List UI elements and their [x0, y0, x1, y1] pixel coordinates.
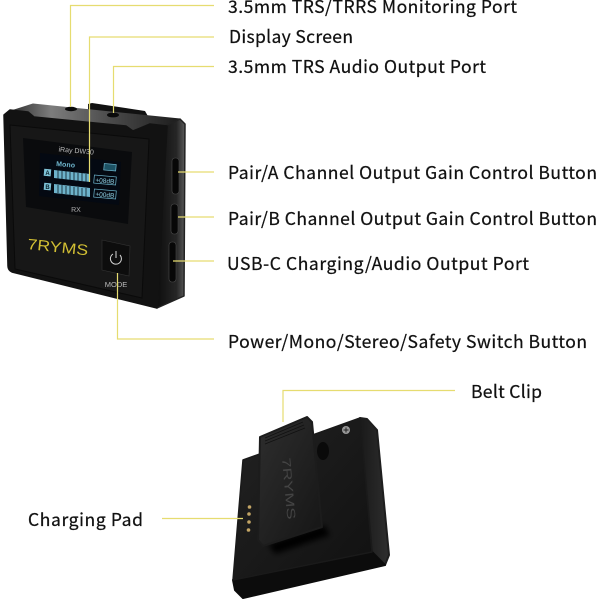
clip edge behind device	[88, 103, 149, 118]
RX label: RX	[71, 207, 81, 214]
channel B meter: +00dB	[95, 191, 115, 200]
clip shadow	[268, 525, 330, 554]
label: belt clip: Belt Clip	[471, 379, 542, 404]
power button	[102, 240, 130, 276]
label: audio output port: 3.5mm TRS Audio Output Port	[228, 54, 486, 79]
leader lines	[70, 6, 455, 518]
label: USB-C: USB-C Charging/Audio Output Port	[227, 251, 529, 276]
top face	[8, 104, 180, 132]
label: display screen: Display Screen	[229, 24, 353, 49]
charging pad contacts	[247, 505, 251, 532]
front device: receiver	[4, 103, 185, 308]
top ports	[65, 107, 77, 111]
clip	[258, 417, 322, 546]
side controls	[169, 158, 179, 282]
channel A meter	[44, 169, 116, 186]
side face	[157, 119, 185, 308]
front face	[4, 110, 167, 308]
channel A meter: A	[45, 171, 50, 177]
body bottom	[233, 552, 385, 598]
display	[39, 153, 121, 205]
battery icon	[104, 163, 116, 171]
channel B meter: B	[45, 185, 50, 191]
label: pair B: Pair/B Channel Output Gain Control Button	[228, 206, 597, 231]
channel A meter: +08dB	[95, 177, 115, 186]
label: pair A: Pair/A Channel Output Gain Control Button	[228, 160, 597, 185]
body side	[360, 418, 389, 565]
device name: iRay DW30	[58, 146, 94, 157]
channel B meter	[44, 183, 116, 200]
mode label: MODE	[105, 280, 127, 289]
brand logo: 7RYMS	[27, 236, 89, 259]
label: charging pad: Charging Pad	[28, 507, 143, 532]
body face	[233, 418, 372, 580]
clip logo: 7RYMS	[279, 457, 298, 520]
screen bezel	[23, 138, 132, 224]
label: power button: Power/Mono/Stereo/Safety Switch Button	[228, 329, 587, 354]
back device: belt clip side	[233, 417, 389, 598]
screw	[342, 426, 350, 434]
mono status: Mono	[56, 161, 75, 170]
clip hinge	[317, 442, 329, 460]
